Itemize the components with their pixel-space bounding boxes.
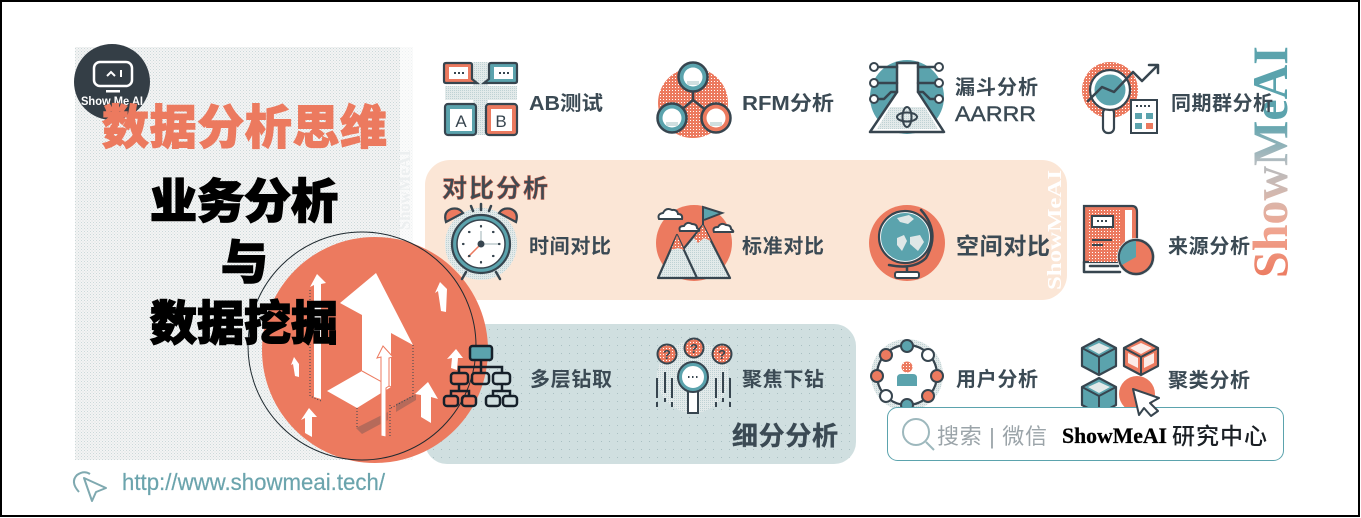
small arrows [435,282,447,312]
logo: ShowMeAI badge: Show Me AI [81,94,143,108]
label: time comparison: 时间对比 [529,235,611,258]
outline circle [248,232,476,460]
search label: 搜索 | 微信 [937,424,1047,449]
orange seam on large arrow [362,371,391,387]
icon: book with pie [1084,206,1155,276]
icon: AB test [444,62,517,135]
icon: cohort magnifier [1082,62,1158,133]
orange disc [262,237,488,463]
dotted shadow lines [310,290,413,437]
logo: ShowMeAI badge [74,44,150,120]
watermark: small ShowMeAI in comparison panel: ShowMeAI [1044,170,1066,290]
label: RFM analysis: RFM分析 [742,92,834,115]
icon: RFM network [658,62,730,138]
central arrow [377,346,393,437]
website URL: http://www.showmeai.tech/ [122,469,386,495]
icon: focus drill magnifier: ? [718,347,726,362]
icon: globe [869,205,945,281]
heading: data analysis thinking: 数据分析思维 [102,101,387,154]
icon: cluster cursor [1133,389,1159,416]
icon: link cursor [74,472,106,501]
label: cohort analysis: 同期群分析 [1171,92,1273,115]
label: multi-level drill: 多层钻取 [530,368,612,391]
watermark: large vertical ShowMeAI: ShowMeAI [1242,46,1298,278]
icon: AB test: A [455,112,467,131]
icon: focus drill magnifier: ? [663,347,671,362]
dotted ground shadows [356,394,416,434]
label: cluster analysis: 聚类分析 [1168,369,1250,392]
research center: 研究中心 [1172,423,1267,449]
label: focus drill: 聚焦下钻 [742,368,824,391]
label: AARRR: AARRR [955,103,1036,126]
icon: magnifier [903,419,934,450]
panel: left dotted background [75,47,413,460]
label: standard comparison: 标准对比 [742,235,824,258]
icon: focus drill magnifier [657,338,732,413]
title line: business analysis: 业务分析 [150,175,338,228]
icon: cluster cubes [1082,339,1158,414]
heading: segmentation analysis: 细分分析 [732,421,838,451]
title line: data mining: 数据挖掘 [150,297,338,350]
tall arrow [310,274,326,399]
icon: focus drill magnifier: ? [690,341,698,356]
label: user analysis: 用户分析 [956,367,1038,391]
illustration: rising arrows circle [248,232,488,463]
icon: hierarchy [444,346,517,406]
label: AB test: AB测试 [529,92,603,115]
search box [888,408,1284,460]
heading: comparison analysis: 对比分析 [442,175,548,203]
label: spatial comparison: 空间对比 [956,233,1050,259]
brand name: ShowMeAI [1062,423,1167,448]
large arrow [327,273,413,408]
icon: alarm clock [445,204,517,280]
title line: and: 与 [221,236,268,289]
panel: segmentation analysis [425,324,856,464]
icon: AB test: B [495,112,507,131]
icon: mountains and flag [656,205,733,281]
icon: user ring [871,339,943,411]
watermark: faint ShowMeAI in left panel: ShowMeAI [394,150,414,230]
label: funnel analysis: 漏斗分析 [955,76,1038,99]
label: source analysis: 来源分析 [1168,235,1250,258]
panel: comparison analysis [425,160,1067,300]
icon: flask funnel [870,60,944,134]
